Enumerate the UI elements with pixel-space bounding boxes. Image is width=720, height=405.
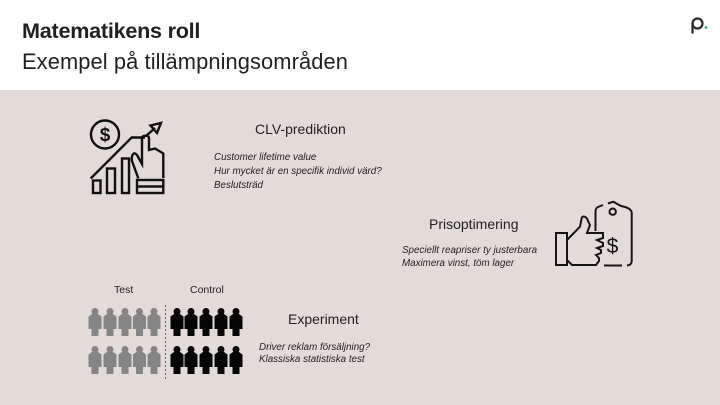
icon: CLV growth chart with hand <box>91 120 163 193</box>
subtitle: Exempel på tillämpningsområden <box>22 49 348 74</box>
text: pricing details <box>402 245 537 269</box>
text: experiment details: Driver reklam försäljning? <box>259 342 370 353</box>
text: experiment details: Klassiska statistiska test <box>259 354 365 365</box>
heading: CLV-prediktion: CLV-prediktion <box>255 121 346 137</box>
text: CLV details: Hur mycket är en specifik individ värd? <box>214 166 382 177</box>
icon: CLV growth chart with hand: $ <box>100 125 111 146</box>
icon: test group people <box>88 308 160 374</box>
heading: Prisoptimering: Prisoptimering <box>429 216 518 232</box>
text: experiment details <box>259 342 370 365</box>
text: CLV details <box>214 152 382 191</box>
text: pricing details: Maximera vinst, töm lager <box>402 258 514 269</box>
text: CLV details: Customer lifetime value <box>214 152 316 163</box>
label: Test: Test <box>114 284 133 296</box>
heading: Experiment: Experiment <box>288 311 359 327</box>
label: Control: Control <box>190 284 224 296</box>
icon: thumbs up with price tag: $ <box>607 235 619 258</box>
panel: content background <box>0 90 720 405</box>
text: CLV details: Beslutsträd <box>214 180 263 191</box>
icon: thumbs up with price tag <box>556 202 632 266</box>
text: pricing details: Speciellt reapriser ty justerbara <box>402 245 537 256</box>
title: Matematikens roll <box>22 18 200 43</box>
icon: control group people <box>170 308 242 374</box>
